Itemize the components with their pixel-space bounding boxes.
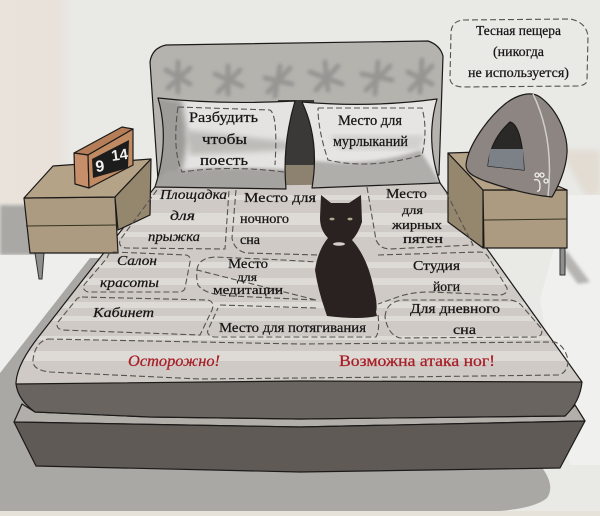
zone: day nap: [385, 300, 542, 338]
left nightstand: [24, 159, 151, 279]
headboard: [150, 41, 443, 180]
right pillow: [302, 99, 445, 190]
mattress dashed zones: [33, 187, 568, 379]
mattress zone labels: йоги: [433, 280, 460, 295]
mattress zone labels: для: [402, 203, 424, 217]
bubble text: не используется): [468, 66, 569, 81]
cat eyes: [329, 218, 353, 220]
clock digits: 9: [95, 158, 105, 176]
bubble text: (никогда: [493, 45, 545, 60]
pillow labels: Разбудить: [189, 110, 258, 126]
mattress zone labels: Место: [228, 257, 268, 272]
mattress zone labels: пятен: [403, 231, 443, 246]
zone: stretching: [208, 305, 379, 337]
bubble text: Тесная пещера: [476, 24, 562, 39]
warning text: Осторожно!: [128, 353, 220, 370]
mattress zone labels: Площадка: [159, 188, 227, 203]
pillow labels: Место для: [338, 113, 402, 129]
mattress zone labels: Студия: [413, 259, 461, 274]
mattress zone labels: Место: [386, 187, 427, 202]
cat: [315, 195, 377, 318]
mattress zone labels: медитации: [213, 282, 283, 297]
zone: fat stains: [367, 187, 473, 249]
gap strip: [14, 404, 585, 427]
mattress zone labels: Место для: [244, 191, 317, 206]
cave opening: [488, 122, 524, 170]
zone: meditation: [197, 257, 318, 300]
cat chest mark: [333, 242, 345, 246]
clock digits: [95, 146, 130, 176]
mattress zone labels: Кабинет: [92, 306, 154, 321]
mattress zone labels: [92, 187, 500, 338]
clock digits: 14: [110, 146, 130, 165]
headboard flower pattern: [166, 60, 432, 96]
pillow labels: чтобы: [202, 132, 247, 148]
left pillow: [150, 95, 295, 192]
zone: night sleep: [232, 190, 318, 255]
warning text: [128, 353, 495, 370]
zone: yoga: [378, 252, 507, 304]
pillow labels: мурлыканий: [333, 134, 408, 150]
paw print: [534, 173, 548, 191]
mattress top: [0, 183, 600, 384]
gap between pillows: [278, 100, 318, 192]
zone: jump pad: [120, 190, 229, 249]
mattress zone labels: Салон: [117, 254, 157, 269]
pillow labels: [189, 110, 408, 169]
mattress zone labels: Для дневного: [410, 302, 500, 317]
mattress zone labels: жирных: [391, 217, 443, 232]
mattress zone labels: для: [170, 209, 195, 224]
left nightstand leg: [35, 253, 44, 279]
speech bubble: cave: [450, 19, 588, 87]
zone: beauty salon: [84, 252, 190, 292]
mattress zone labels: для: [237, 270, 258, 284]
mattress zone labels: красоты: [100, 276, 159, 291]
alarm clock: [74, 127, 133, 188]
mattress zone labels: ночного: [240, 212, 289, 227]
pillow labels: поесть: [200, 153, 248, 169]
pillow dashed zone: [176, 107, 284, 172]
right nightstand: [448, 152, 567, 275]
bed base: [14, 421, 585, 472]
zone: office: [57, 297, 213, 335]
mattress zone labels: прыжка: [148, 230, 200, 245]
mattress zone labels: сна: [240, 233, 261, 248]
bubble text: [468, 24, 569, 81]
warning text: Возможна атака ног!: [339, 353, 495, 370]
cat cave house: [466, 94, 567, 197]
mattress zone labels: сна: [453, 323, 477, 338]
zone: warning: [33, 339, 568, 379]
mattress zone labels: Место для потягивания: [219, 321, 367, 336]
mattress side: [16, 381, 582, 419]
